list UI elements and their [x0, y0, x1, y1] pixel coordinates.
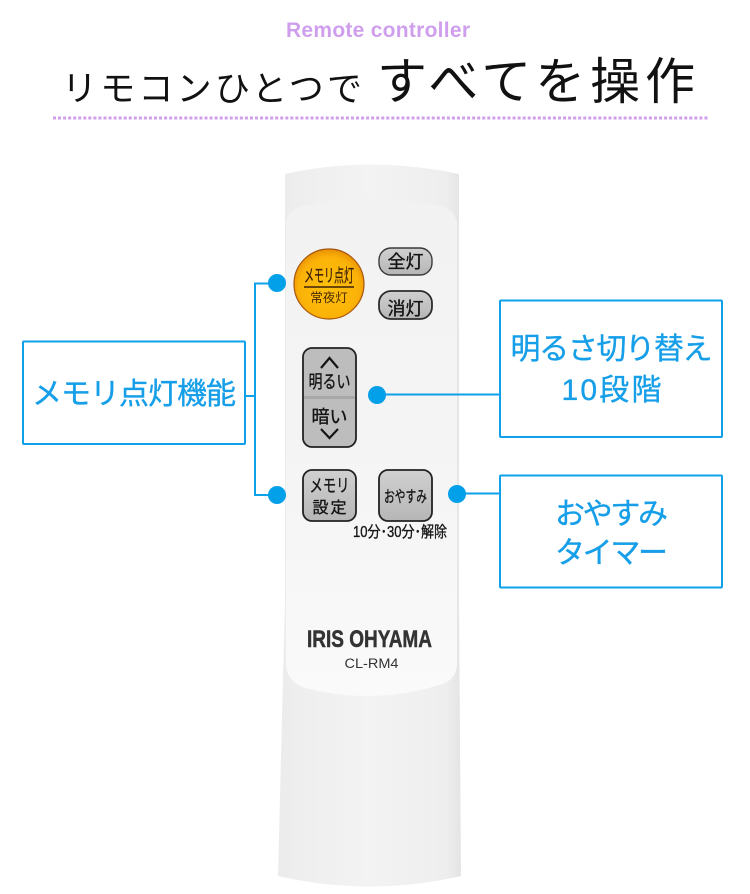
sleep timer button: おやすみ — [384, 488, 427, 506]
brightness rocker button: 暗い — [312, 407, 348, 427]
off button: 消灯 — [388, 299, 424, 319]
title: すべてを操作 — [377, 54, 695, 110]
callout: sleep timer: タイマー — [555, 537, 668, 570]
memory light button — [294, 249, 364, 319]
title dotted rule — [53, 116, 708, 120]
memory setting button — [303, 470, 356, 521]
callout: brightness 10 levels: 明るさ切り替え — [510, 333, 712, 366]
all-on button: 全灯 — [388, 252, 424, 272]
model number: CL-RM4 — [344, 656, 399, 671]
title: リモコンひとつで — [62, 70, 362, 109]
brightness rocker button — [303, 348, 356, 447]
callout: brightness 10 levels: 10段階 — [562, 374, 662, 407]
connector: sleep timer — [448, 485, 500, 503]
all-on button — [379, 248, 432, 275]
memory light button: 常夜灯 — [310, 291, 348, 305]
callout: brightness 10 levels — [500, 300, 722, 437]
connector: memory light — [245, 274, 286, 504]
remote body — [278, 164, 461, 886]
subtitle: Remote controller — [286, 19, 470, 42]
remote control — [278, 164, 461, 886]
remote face panel — [286, 198, 457, 696]
brightness rocker button: 明るい — [308, 372, 350, 392]
timer options text: 10分･30分･解除 — [353, 523, 447, 541]
connector: brightness — [368, 386, 500, 404]
brand logo: IRIS OHYAMA — [307, 626, 432, 653]
memory light button: メモリ点灯 — [304, 266, 354, 286]
sleep timer button — [379, 470, 432, 521]
title — [62, 54, 695, 110]
memory setting button: メモリ — [310, 476, 350, 496]
callout: memory light function: メモリ点灯機能 — [32, 378, 236, 411]
callout: sleep timer — [500, 476, 722, 588]
off button — [379, 291, 432, 319]
callout: sleep timer: おやすみ — [555, 498, 668, 531]
callout: memory light function — [23, 342, 245, 444]
memory setting button: 設定 — [312, 499, 346, 517]
